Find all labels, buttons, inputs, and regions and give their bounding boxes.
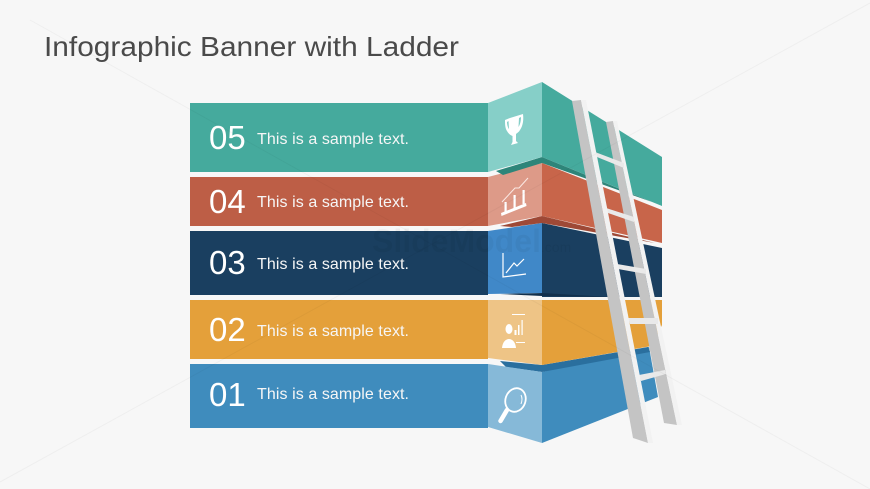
banner 02 <box>190 300 662 365</box>
watermark: SlideModel.com <box>372 223 571 259</box>
ladder rungs <box>595 152 666 381</box>
icon: trophy <box>505 114 523 145</box>
banner 05: 05 <box>209 119 246 156</box>
ladder <box>572 100 682 443</box>
banner 01: This is a sample text. <box>257 386 409 403</box>
banner 01: 01 <box>209 376 246 413</box>
banner 02: This is a sample text. <box>257 323 409 340</box>
banner 03: This is a sample text. <box>257 256 409 273</box>
banner 05 <box>190 82 662 206</box>
icon: trend line <box>502 178 528 202</box>
banner 02: 02 <box>209 311 246 348</box>
icon: bar chart with trend <box>501 190 526 216</box>
ladder right rail <box>606 121 682 425</box>
icon: presenter <box>502 314 525 348</box>
banner 03: 03 <box>209 244 246 281</box>
banner 03 <box>190 223 662 297</box>
icon: line chart <box>503 253 526 277</box>
title: Infographic Banner with Ladder <box>44 31 459 62</box>
banner 04: 04 <box>209 183 246 220</box>
banner 05: This is a sample text. <box>257 131 409 148</box>
icon: magnifier <box>500 385 529 421</box>
banner 01 <box>190 347 658 443</box>
ladder left rail <box>572 100 653 443</box>
banner 04 <box>190 163 662 243</box>
banner 04: This is a sample text. <box>257 194 409 211</box>
